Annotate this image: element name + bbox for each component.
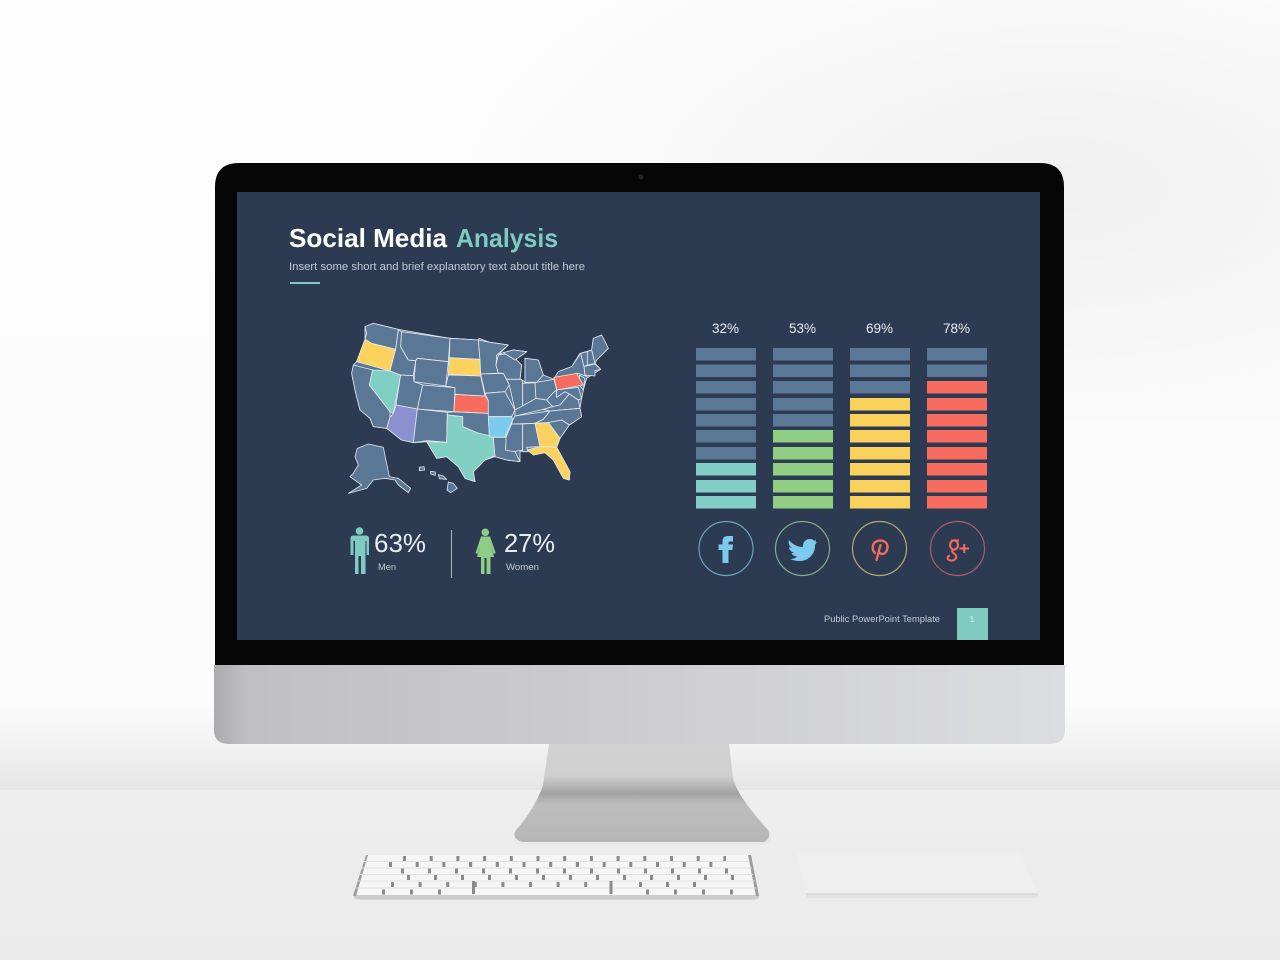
stat divider — [451, 530, 452, 578]
state: Georgia — [535, 423, 560, 447]
bar column: Google Plus 78% — [927, 321, 987, 508]
state: Hawaii — [447, 482, 457, 493]
state: Indiana — [523, 383, 536, 406]
state: Pennsylvania — [554, 373, 583, 390]
bar column: Pinterest 69% — [850, 321, 910, 508]
bar column: Twitter 53%: 53% — [789, 321, 816, 336]
state: New Jersey — [579, 375, 585, 390]
state: Massachusetts, Connecticut, Rhode Island — [584, 364, 601, 376]
title — [289, 223, 558, 253]
page number box: 1 — [970, 615, 975, 624]
icon: woman — [476, 528, 496, 574]
state: New Mexico — [413, 409, 447, 443]
men percentage: 63% — [374, 528, 426, 558]
state: Montana — [401, 332, 450, 362]
state: Virginia — [543, 394, 580, 411]
state: North Carolina — [535, 408, 582, 425]
icon: Google Plus — [930, 522, 984, 576]
state: Nebraska — [446, 375, 485, 396]
bar column: Pinterest 69%: 69% — [866, 321, 893, 336]
footer label: Public PowerPoint Template — [824, 614, 940, 624]
state: Alabama — [523, 423, 540, 452]
state: Ohio — [535, 379, 557, 400]
slide screen — [237, 192, 1040, 640]
state: Michigan upper — [503, 350, 527, 360]
state: Missouri — [485, 392, 515, 417]
state: Mississippi — [506, 424, 523, 452]
state: Minnesota — [478, 340, 508, 374]
title underline — [290, 282, 320, 284]
state: Utah — [396, 375, 423, 409]
map silhouette — [352, 323, 608, 482]
state: Nevada — [369, 370, 401, 413]
monitor bezel — [215, 163, 1064, 665]
trackpad — [797, 853, 1038, 898]
state: Arkansas — [488, 417, 513, 437]
subtitle: Insert some short and brief explanatory text about title here — [289, 261, 585, 273]
bar column: Facebook 32% — [696, 321, 756, 508]
icon: man — [350, 527, 369, 574]
state: North Dakota — [449, 338, 480, 359]
state: Texas — [427, 415, 495, 482]
state: California — [352, 365, 390, 428]
state: Louisiana — [493, 437, 520, 462]
state: Washington — [365, 323, 398, 349]
monitor chin — [214, 665, 1065, 744]
state: Alaska — [348, 444, 411, 493]
women stat — [476, 528, 555, 574]
state: Kentucky — [515, 398, 553, 416]
state: Colorado — [417, 385, 455, 412]
state: Arizona — [387, 405, 417, 443]
monitor stand — [514, 744, 770, 844]
state: Wyoming — [414, 358, 448, 386]
keyboard — [353, 855, 759, 900]
state: South Carolina — [548, 420, 569, 438]
state: Oklahoma — [447, 412, 489, 437]
women label: Women — [506, 562, 539, 572]
women percentage: 27% — [504, 528, 555, 558]
state: Maine — [592, 335, 608, 363]
state: New York — [554, 353, 587, 378]
state: South Dakota — [448, 358, 481, 376]
icon: Twitter — [776, 522, 830, 576]
state: Wisconsin — [496, 353, 522, 379]
state: Maryland and Delaware — [557, 387, 582, 400]
title: Analysis — [456, 223, 558, 253]
webcam — [638, 174, 644, 180]
state: Florida — [527, 447, 570, 480]
state: Oregon — [357, 339, 396, 371]
state: Michigan lower — [525, 358, 543, 382]
state: Kansas — [454, 394, 488, 413]
title: Social Media — [289, 223, 448, 253]
state: New Hampshire — [587, 350, 595, 365]
state: Hawaii islands — [419, 467, 447, 479]
icon: Pinterest — [852, 522, 906, 576]
bar column: Facebook 32%: 32% — [712, 321, 739, 336]
state: Idaho — [390, 330, 416, 376]
men stat — [350, 527, 426, 574]
page number box — [957, 608, 988, 640]
state: West Virginia — [547, 390, 569, 407]
icon: Facebook — [699, 522, 753, 576]
men label: Men — [378, 562, 396, 572]
bar column: Google Plus 78%: 78% — [943, 321, 970, 336]
US map — [348, 323, 608, 493]
state: Illinois — [507, 379, 523, 410]
state: Tennessee — [512, 411, 550, 424]
bar column: Twitter 53% — [773, 321, 833, 508]
state: Vermont — [581, 352, 587, 367]
state: Iowa — [481, 373, 509, 393]
